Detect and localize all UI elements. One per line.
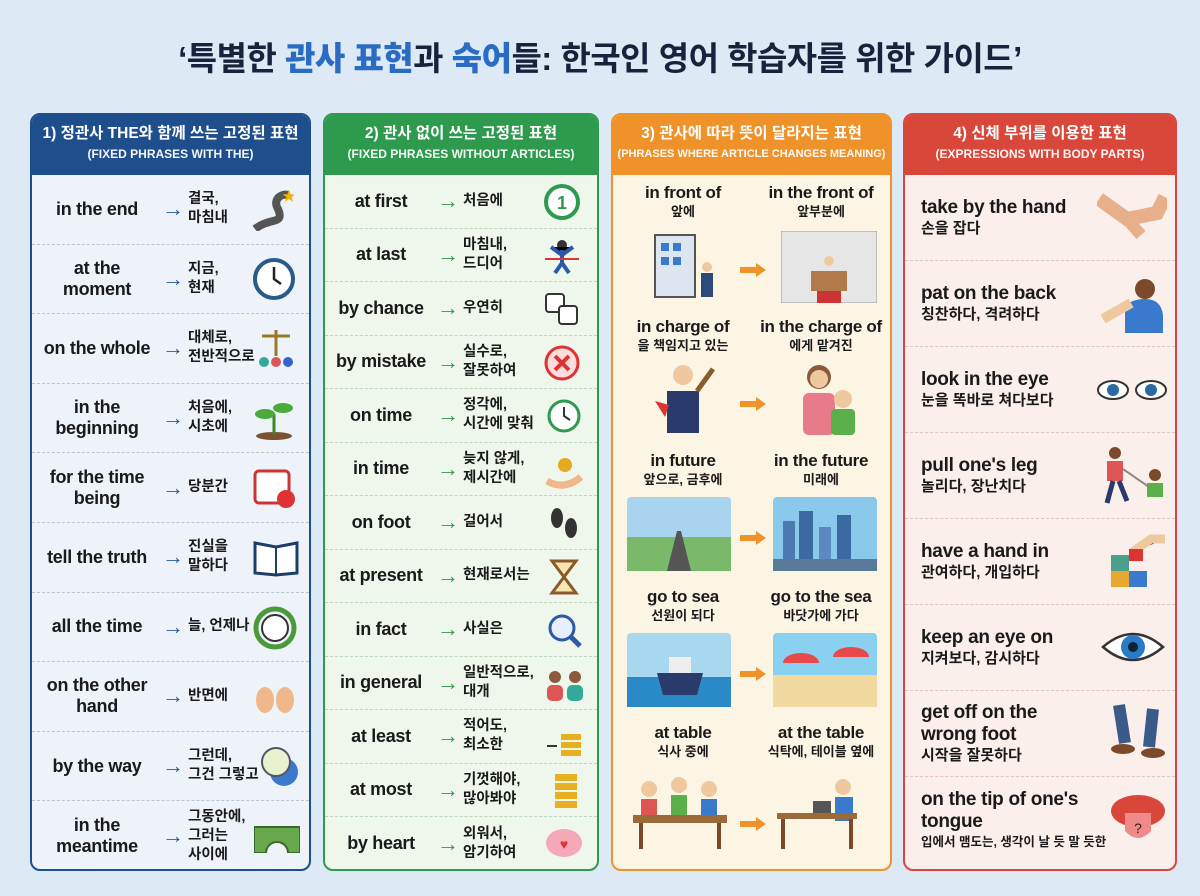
rows panel 4 (905, 193, 1175, 848)
rows panel 2: 잘못하여 (463, 363, 516, 379)
rows panel 1: → (162, 405, 184, 430)
rows panel 1: → (162, 335, 184, 360)
rows panel 2: in time (353, 458, 409, 478)
rows panel 4: on the tip of one's (921, 788, 1078, 810)
rows panel 4: wrong foot (921, 724, 1016, 745)
rows panel 1: all the time (52, 616, 142, 636)
rows panel 1: on the whole (44, 338, 150, 358)
pair: go to sea (627, 587, 877, 707)
rows panel 2: by heart (347, 833, 415, 853)
panel: fixed phrases with the (30, 113, 311, 871)
rows panel 4: 칭찬하다, 격려하다 (921, 306, 1040, 323)
rows panel 1: being (74, 488, 120, 508)
header panel 2: (FIXED PHRASES WITHOUT ARTICLES) (348, 147, 574, 161)
pair: at table (633, 723, 874, 849)
rows panel 1: moment (63, 279, 131, 299)
pair: go to sea: go to sea (647, 587, 719, 606)
rows panel 1: by the way (52, 756, 142, 776)
rows panel 2: 걸어서 (463, 514, 503, 530)
header panel 4: 4) 신체 부위를 이용한 표현 (953, 125, 1127, 142)
rows panel 2: in general (340, 672, 422, 692)
rows panel 1: in the (74, 815, 120, 835)
rows panel 1: on the other (47, 675, 147, 695)
panel: expressions with body parts (903, 113, 1177, 871)
rows panel 4: 입에서 맴도는, 생각이 날 듯 말 듯한 (921, 834, 1106, 848)
rows panel 1: hand (76, 696, 118, 716)
rows panel 2: 드디어 (463, 256, 503, 272)
rows panel 4: 시작을 잘못하다 (921, 747, 1022, 764)
rows panel 2: 사실은 (463, 621, 503, 637)
rows panel 4: ? (1134, 820, 1142, 836)
rows panel 1: 처음에, (188, 400, 232, 416)
rows panel 2: in fact (356, 619, 406, 639)
rows panel 4: get off on the (921, 702, 1037, 723)
pair: go to sea: go to the sea (771, 587, 871, 606)
rows panel 1: → (162, 475, 184, 500)
rows panel 1: → (162, 614, 184, 639)
rows panel 2: → (437, 777, 459, 802)
rows panel 2: 1 (557, 193, 567, 213)
pair: in front of: 앞부분에 (797, 204, 845, 219)
rows panel 1: → (162, 196, 184, 221)
pair: in future: 앞으로, 금후에 (644, 472, 722, 487)
header panel 1: 1) 정관사 THE와 함께 쓰는 고정된 표현 (42, 125, 298, 142)
rows panel 1: → (162, 753, 184, 778)
rows panel 1: 지금, (188, 261, 219, 277)
rows panel 1: → (162, 544, 184, 569)
rows panel 2: 마침내, (463, 237, 507, 253)
panel: phrases where article changes meaning (611, 113, 892, 871)
rows panel 2: → (437, 349, 459, 374)
title: ‘특별한 관사 표현과 숙어들: 한국인 영어 학습자를 위한 가이드’ (178, 40, 1022, 77)
pair: in front of: 앞에 (671, 204, 695, 219)
rows panel 1 (32, 188, 309, 863)
rows panel 2: 적어도, (463, 718, 507, 734)
rows panel 1: 마침내 (188, 210, 228, 226)
rows panel 1: in the (74, 397, 120, 417)
rows panel 2: by chance (338, 298, 424, 318)
rows panel 2: at most (350, 779, 412, 799)
rows panel 2: 늦지 않게, (463, 451, 524, 467)
rows panel 1: 그런데, (188, 748, 232, 764)
pair: in charge of: in the charge of (760, 317, 882, 336)
pair: at table: 식탁에, 테이블 옆에 (768, 744, 874, 759)
pair: in future: 미래에 (803, 472, 839, 487)
rows panel 2: → (437, 616, 459, 641)
rows panel 4: pat on the back (921, 283, 1056, 304)
header panel 1: (FIXED PHRASES WITH THE) (87, 147, 254, 161)
rows panel 4: 관여하다, 개입하다 (921, 564, 1040, 581)
pair: in charge of: 을 책임지고 있는 (638, 338, 728, 353)
rows panel 4: 눈을 똑바로 쳐다보다 (921, 392, 1054, 409)
rows panel 2: → (437, 563, 459, 588)
pair: go to sea: 선원이 되다 (651, 608, 715, 623)
rows panel 2: → (437, 188, 459, 213)
rows panel 1: 현재 (188, 280, 215, 296)
rows panel 2: 외워서, (463, 826, 507, 842)
rows panel 4: 지켜보다, 감시하다 (921, 650, 1040, 667)
rows panel 2: → (437, 670, 459, 695)
rows panel 2: at least (351, 726, 411, 746)
rows panel 1: in the end (56, 199, 138, 219)
rows panel 2: → (437, 509, 459, 534)
rows panel 1: 말하다 (188, 558, 228, 574)
rows panel 4: keep an eye on (921, 627, 1053, 648)
header panel 3: 3) 관사에 따라 뜻이 달라지는 표현 (641, 125, 862, 142)
header panel 2 (325, 115, 597, 175)
rows panel 2: 기껏해야, (463, 772, 520, 788)
rows panel 4: tongue (921, 810, 983, 832)
rows panel 2: ♥ (560, 836, 568, 852)
rows panel 1: → (162, 823, 184, 848)
rows panel 1: → (162, 683, 184, 708)
rows panel 2: at last (356, 244, 406, 264)
pair: in future: in the future (774, 451, 868, 470)
rows panel 1: at the (74, 258, 120, 278)
pair: in charge of (637, 317, 882, 435)
rows panel 2: 처음에 (463, 193, 503, 209)
pair: in charge of: 에게 맡겨진 (789, 338, 853, 353)
rows panel 2 (325, 184, 597, 861)
rows panel 4: 손을 잡다 (921, 220, 980, 237)
pair: go to sea: 바닷가에 가다 (783, 608, 859, 623)
rows panel 1: tell the truth (47, 547, 147, 567)
rows panel 2: 일반적으로, (463, 665, 534, 681)
header panel 1 (32, 115, 309, 175)
rows panel 2: 암기하여 (463, 845, 516, 861)
rows panel 1: beginning (55, 418, 139, 438)
pair: in front of (645, 183, 877, 303)
rows panel 2: 현재로서는 (463, 567, 530, 583)
rows panel 4: look in the eye (921, 369, 1048, 390)
rows panel 4: take by the hand (921, 197, 1066, 218)
rows panel 1: 그건 그렇고 (188, 767, 259, 783)
rows panel 1: 시초에 (188, 419, 228, 435)
rows panel 2: → (437, 456, 459, 481)
rows panel 1: 늘, 언제나 (188, 618, 249, 634)
rows panel 1: 그러는 (188, 828, 228, 844)
rows panel 1: 진실을 (188, 539, 228, 555)
rows panel 2: → (437, 831, 459, 856)
rows panel 2: 최소한 (463, 737, 503, 753)
pair: at table: 식사 중에 (657, 744, 709, 759)
rows panel 1: 그동안에, (188, 809, 245, 825)
pair: in future: in future (650, 451, 716, 470)
rows panel 1: 결국, (188, 191, 219, 207)
pair: at table: at table (654, 723, 712, 742)
header panel 3 (613, 115, 890, 175)
rows panel 1: 대체로, (188, 330, 232, 346)
header panel 3: (PHRASES WHERE ARTICLE CHANGES MEANING) (618, 148, 885, 160)
rows panel 1: 전반적으로 (188, 349, 255, 365)
rows panel 1: for the time (50, 467, 144, 487)
rows panel 2: 우연히 (463, 300, 503, 316)
rows panel 2: at first (355, 191, 407, 211)
rows panel 2: → (437, 402, 459, 427)
rows panel 2: → (437, 723, 459, 748)
rows panel 1: → (162, 266, 184, 291)
rows panel 2: 실수로, (463, 344, 507, 360)
pair: in front of: in front of (645, 183, 721, 202)
rows panel 2: 시간에 맞춰 (463, 416, 534, 432)
pair: in charge of: in charge of (637, 317, 729, 336)
header panel 4 (905, 115, 1175, 175)
panel: fixed phrases without articles (323, 113, 599, 871)
rows panel 2: 제시간에 (463, 470, 516, 486)
rows panel 4: pull one's leg (921, 455, 1037, 476)
rows panel 2: by mistake (336, 351, 426, 371)
rows panel 1: 반면에 (188, 688, 228, 704)
rows panel 2: 정각에, (463, 397, 507, 413)
rows panel 1: 당분간 (188, 479, 228, 495)
rows panel 2: on time (350, 405, 412, 425)
pair: in future (627, 451, 877, 571)
pair: at table: at the table (778, 723, 864, 742)
rows panel 2: → (437, 242, 459, 267)
rows panel 1: meantime (56, 836, 138, 856)
rows panel 2: at present (339, 565, 423, 585)
rows panel 2: 대개 (463, 684, 490, 700)
rows panel 4: 놀리다, 장난치다 (921, 478, 1026, 495)
header panel 2: 2) 관사 없이 쓰는 고정된 표현 (365, 125, 557, 142)
rows panel 2: → (437, 295, 459, 320)
rows panel 4: have a hand in (921, 541, 1049, 562)
rows panel 1: 사이에 (188, 847, 228, 863)
header panel 4: (EXPRESSIONS WITH BODY PARTS) (936, 147, 1144, 161)
pair: in front of: in the front of (768, 183, 874, 202)
rows panel 2: 많아봐야 (463, 791, 516, 807)
rows panel 2: on foot (352, 512, 410, 532)
